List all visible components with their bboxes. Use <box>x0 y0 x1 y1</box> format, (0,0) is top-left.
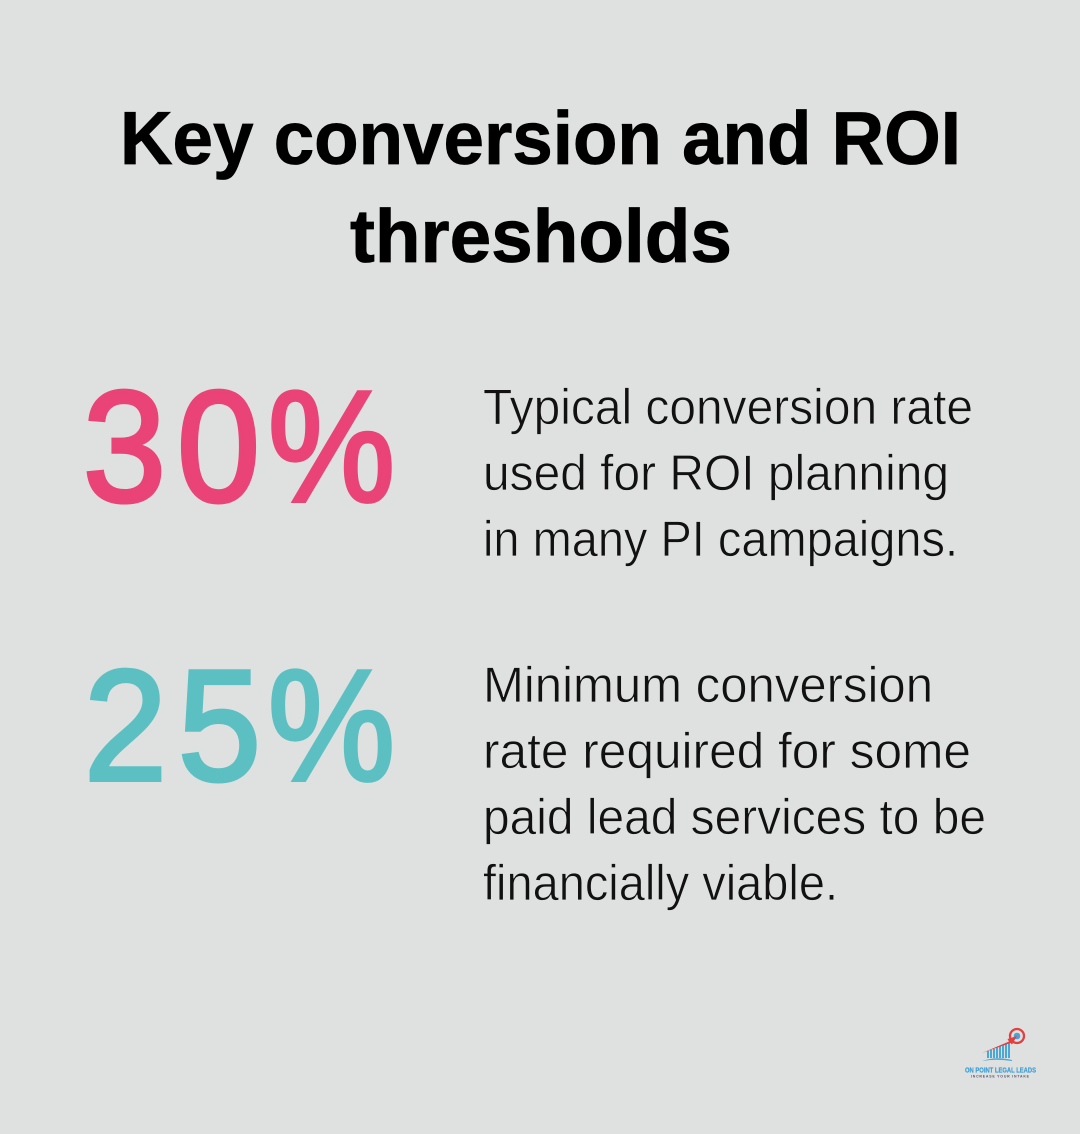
title: thresholds <box>350 194 732 278</box>
stat: 30% <box>83 359 395 535</box>
stat: 25%: 2 <box>84 638 167 814</box>
logo: On Point Legal Leads <box>965 1029 1036 1078</box>
stat: 25% <box>84 638 395 814</box>
icon: target <box>1010 1029 1024 1043</box>
description: 25% stat: rate required for some <box>483 723 971 779</box>
description: 30% stat: in many PI campaigns. <box>483 511 958 567</box>
description: 30% stat: Typical conversion rate <box>483 379 973 435</box>
description: 25% stat: Minimum conversion <box>483 657 933 713</box>
icon: arrow <box>982 1036 1017 1053</box>
stat: 30%: % <box>268 359 395 535</box>
description: 25% stat <box>483 657 986 911</box>
description: 30% stat <box>483 379 973 567</box>
description: 30% stat: used for ROI planning <box>483 445 949 501</box>
description: 25% stat: financially viable. <box>483 855 838 911</box>
description: 25% stat: paid lead services to be <box>483 789 986 845</box>
stat: 30%: 0 <box>177 359 260 535</box>
stat: 30%: 3 <box>83 359 166 535</box>
stat: 25%: 5 <box>178 638 261 814</box>
logo tagline: INCREASE YOUR INTAKE <box>971 1074 1030 1078</box>
logo wordmark: ON POINT LEGAL LEADS <box>965 1068 1036 1074</box>
stat: 25%: % <box>268 638 395 814</box>
icon: bars <box>982 1042 1012 1061</box>
title <box>120 96 961 278</box>
title: Key conversion and ROI <box>120 96 961 180</box>
